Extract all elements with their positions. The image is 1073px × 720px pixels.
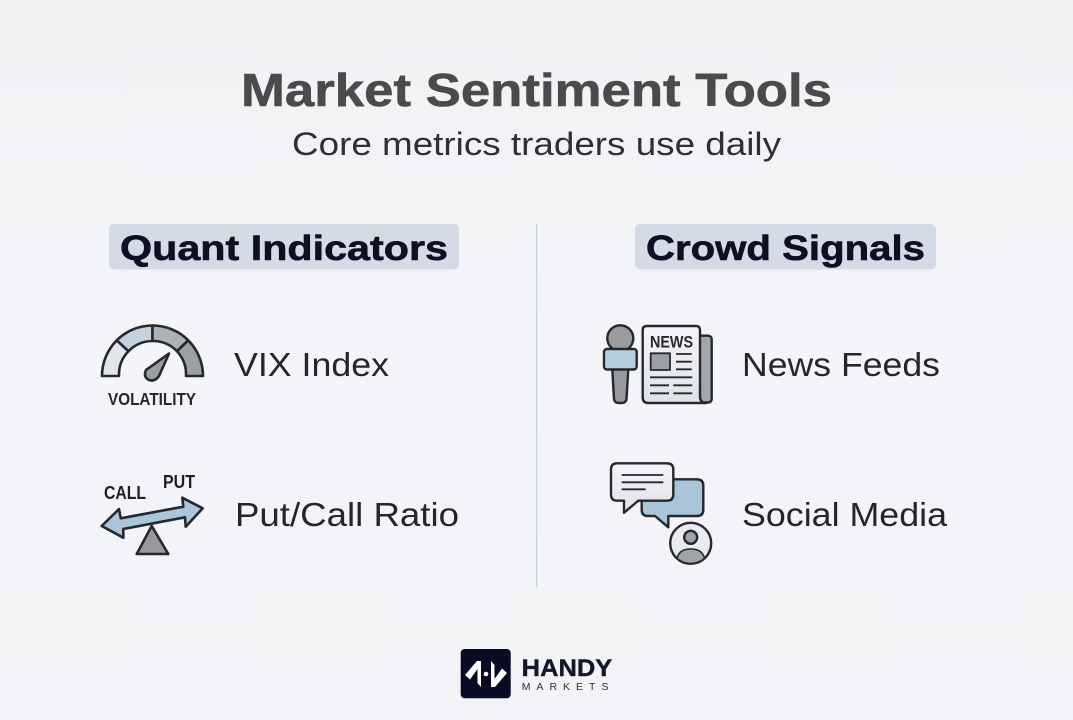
wordmark subtitle: MARKETS xyxy=(522,681,614,693)
subtitle: Core metrics traders use daily xyxy=(292,126,781,162)
panel: crowd signals xyxy=(604,224,948,564)
logo: Handy Markets xyxy=(461,649,614,698)
icon: put call seesaw: PUT xyxy=(163,472,195,492)
header xyxy=(241,64,832,162)
logo mark xyxy=(461,649,511,698)
icon: put call seesaw: CALL xyxy=(104,483,146,503)
icon: microphone and newspaper: NEWS xyxy=(650,333,693,351)
center divider line xyxy=(536,224,537,587)
panel: quant indicators xyxy=(102,224,459,554)
heading: crowd signals: Crowd Signals xyxy=(646,228,925,268)
heading: quant indicators: Quant Indicators xyxy=(120,228,448,268)
icon: put call seesaw xyxy=(102,472,203,554)
wordmark: HANDY xyxy=(522,655,612,682)
label: VIX Index: VIX Index xyxy=(234,346,390,383)
icon: volatility gauge xyxy=(102,326,203,409)
label: News Feeds: News Feeds xyxy=(742,346,940,383)
icon: microphone and newspaper xyxy=(604,325,712,403)
title: Market Sentiment Tools xyxy=(241,64,832,116)
label: Social Media: Social Media xyxy=(742,496,948,533)
icon: volatility gauge: VOLATILITY xyxy=(108,389,196,409)
icon: chat bubbles and user xyxy=(611,463,711,564)
label: Put/Call Ratio: Put/Call Ratio xyxy=(235,496,459,533)
